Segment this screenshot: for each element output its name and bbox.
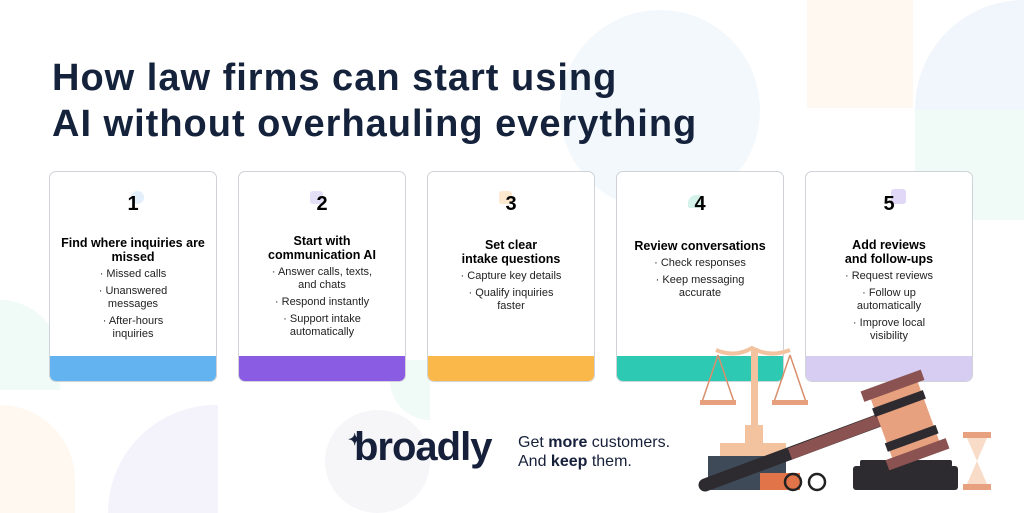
card 1: messages <box>108 298 158 310</box>
tagline: And keep them. <box>518 453 632 470</box>
card 2 <box>238 171 406 382</box>
card 2: · Support intake <box>283 313 361 325</box>
tagline <box>518 434 670 470</box>
card 1: inquiries <box>113 328 153 340</box>
card 2: communication AI <box>268 248 376 262</box>
card 1: Find where inquiries are missed <box>61 236 205 264</box>
card 5: and follow-ups <box>845 252 933 266</box>
card 1: · Unanswered <box>99 285 167 297</box>
card 3: · Qualify inquiries <box>468 287 553 299</box>
card 2: 2 <box>316 193 328 215</box>
card 5: visibility <box>870 330 908 342</box>
card 5: · Improve local <box>853 317 925 329</box>
card 2: · Respond instantly <box>275 296 369 308</box>
card 5: Add reviews <box>852 238 926 252</box>
card 3: intake questions <box>462 252 560 266</box>
card 3: 3 <box>505 193 517 215</box>
illustration: scales, gavel, books <box>698 346 991 492</box>
title <box>52 57 697 145</box>
card 4: Review conversations <box>634 239 766 253</box>
card 2: and chats <box>298 279 346 291</box>
card 3: · Capture key details <box>461 270 561 282</box>
card 3 <box>427 171 595 382</box>
title: AI without overhauling everything <box>52 103 697 145</box>
title: How law firms can start using <box>52 57 617 99</box>
card 4: 4 <box>694 193 706 215</box>
card 2: automatically <box>290 326 354 338</box>
card 5: 5 <box>883 193 895 215</box>
card 3: Set clear <box>485 238 537 252</box>
card 4 <box>616 171 784 382</box>
card 1 <box>49 171 217 382</box>
card 5: · Request reviews <box>845 270 933 282</box>
card 2: Start with <box>294 234 350 248</box>
card 5: · Follow up <box>862 287 916 299</box>
card 2: · Answer calls, texts, <box>272 266 372 278</box>
logo: broadly: broadly <box>354 425 491 469</box>
card 1: · After-hours <box>103 315 163 327</box>
tagline: Get more customers. <box>518 434 670 451</box>
card 5 <box>805 171 973 382</box>
card 4: · Keep messaging <box>656 274 744 286</box>
card 3: faster <box>497 300 525 312</box>
card 1: 1 <box>127 193 139 215</box>
card 5: automatically <box>857 300 921 312</box>
card 1: · Missed calls <box>100 268 166 280</box>
card 4: accurate <box>679 287 721 299</box>
logo: broadly: ✦ <box>348 432 360 449</box>
card 4: · Check responses <box>654 257 746 269</box>
